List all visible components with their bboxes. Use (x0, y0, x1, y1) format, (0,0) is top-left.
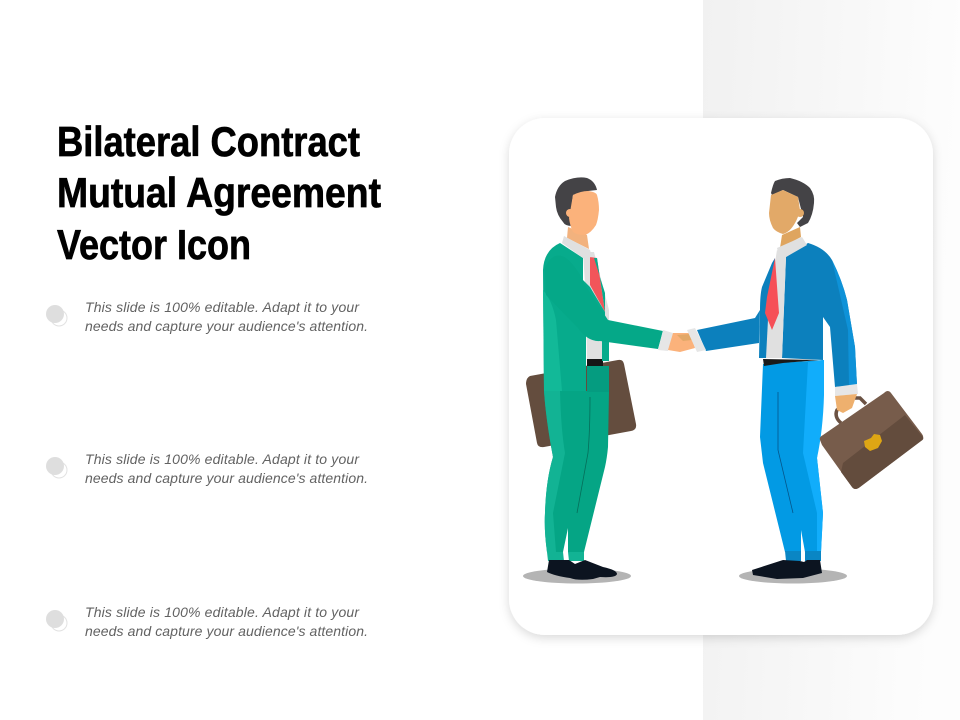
right man sleeve cuff (835, 384, 858, 396)
handshake hands (668, 333, 695, 352)
bullet item 1: needs and capture your audience's attention. (85, 318, 368, 334)
bullet item 2: This slide is 100% editable. Adapt it to your (85, 451, 360, 467)
title (57, 118, 381, 268)
left man cuff (658, 330, 673, 351)
bullet item 1: This slide is 100% editable. Adapt it to your (85, 299, 360, 315)
briefcase behind left man (526, 360, 636, 447)
right hand (835, 394, 857, 413)
left man hair (555, 177, 597, 226)
right man arm cuff (687, 328, 706, 352)
left man jacket (543, 243, 605, 391)
left man shirt, belt and inner trousers (583, 252, 609, 392)
title: Mutual Agreement (57, 169, 381, 216)
right man tie (765, 258, 779, 330)
bullet item 3: needs and capture your audience's attention. (85, 623, 368, 639)
bullet item 2: needs and capture your audience's attention. (85, 470, 368, 486)
ground shadow right (739, 568, 847, 584)
right man jacket (759, 258, 775, 358)
left man face (569, 191, 599, 235)
title: Bilateral Contract (57, 118, 360, 165)
right man back arm (808, 243, 857, 387)
right man shoes (752, 560, 822, 579)
right man ear (796, 209, 804, 217)
right man shirt (766, 250, 786, 358)
right man neck (780, 227, 801, 248)
briefcase clasp (864, 434, 882, 451)
right briefcase (820, 391, 923, 489)
left man shoes (547, 560, 617, 580)
figure: left man in green suit (523, 177, 695, 583)
background panel (703, 0, 960, 720)
right man hair (771, 178, 814, 227)
right man trousers (760, 360, 824, 552)
title: Vector Icon (57, 221, 251, 268)
right man belt (763, 359, 819, 366)
right man trouser cuffs (785, 551, 821, 561)
left man trousers (544, 391, 609, 552)
left man arm (545, 256, 663, 349)
briefcase handle (836, 398, 866, 423)
left man collar (562, 236, 592, 258)
left man trouser cuffs (547, 552, 584, 561)
left man neck (567, 227, 589, 249)
right man front arm (697, 310, 760, 351)
bullet item 3 (46, 604, 368, 639)
bullet item 1 (46, 299, 368, 334)
right man face (769, 190, 800, 234)
figure: right man in blue suit (687, 178, 923, 584)
right man collar (777, 237, 807, 259)
left man ear (566, 209, 574, 217)
ground shadow left (523, 568, 631, 584)
bullet item 2 (46, 451, 368, 486)
bullet item 3: This slide is 100% editable. Adapt it to your (85, 604, 360, 620)
illustration card (509, 118, 933, 635)
left man tie (590, 257, 605, 312)
